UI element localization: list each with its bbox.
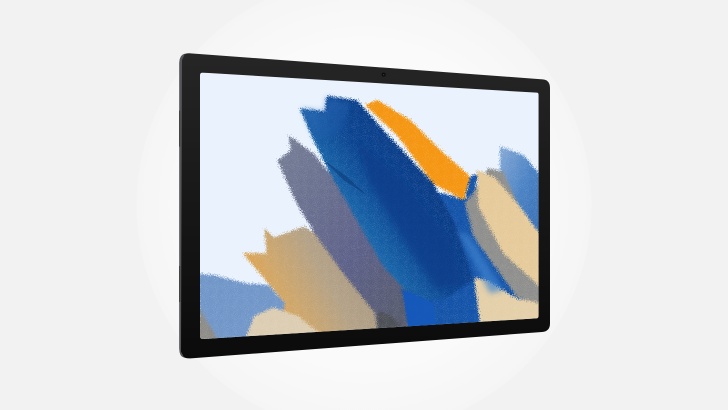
artwork <box>198 96 545 340</box>
orange stroke <box>365 100 470 201</box>
dark slash in blue stroke <box>322 158 367 195</box>
speckled top of main blue stroke <box>302 97 350 143</box>
dark patch at base of grey stroke <box>377 312 405 329</box>
grey corner <box>198 307 218 340</box>
tablet product illustration <box>179 46 550 362</box>
grey stroke, right <box>463 168 545 307</box>
vivid blue base <box>403 290 437 327</box>
cream stroke, right <box>477 170 542 288</box>
blue stroke, lower left <box>198 273 302 340</box>
tablet body <box>179 53 550 358</box>
screen <box>197 70 545 343</box>
dark blue shading <box>357 140 463 290</box>
light blue streak <box>457 230 503 293</box>
side edge <box>179 54 185 357</box>
blue strip right <box>399 170 526 326</box>
screen background <box>197 70 543 343</box>
blue stroke, top right <box>500 147 542 237</box>
tan stroke <box>243 227 387 337</box>
camera <box>382 73 396 77</box>
cream stroke, bottom right <box>474 277 542 323</box>
speaker grilles <box>179 111 180 302</box>
grey-purple stroke <box>277 135 410 330</box>
main blue stroke <box>300 96 473 299</box>
cream stroke, bottom <box>246 307 323 337</box>
